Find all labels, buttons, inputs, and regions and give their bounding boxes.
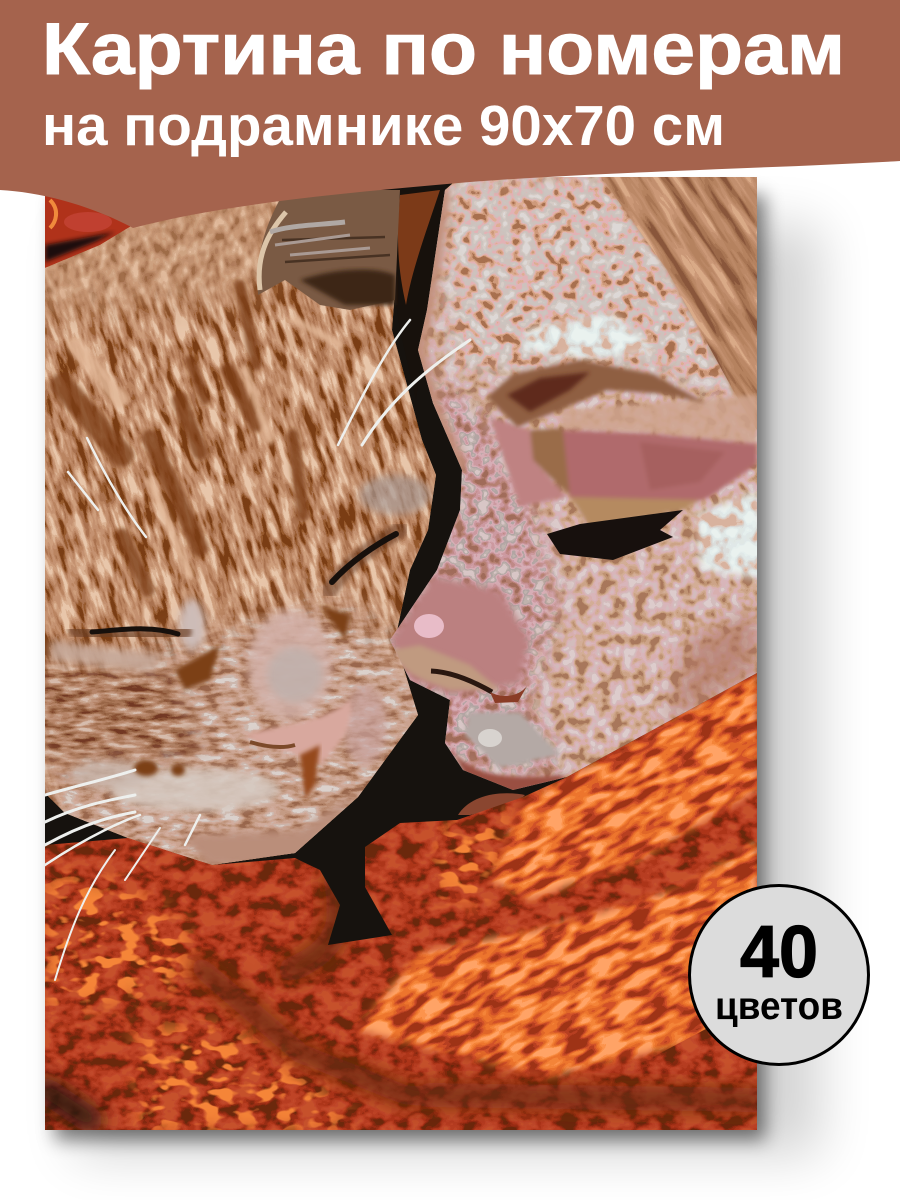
tabby stripes	[62, 285, 303, 590]
badge: 40 colours	[690, 886, 868, 1064]
right jaw tone	[665, 610, 757, 725]
badge number: 40	[740, 912, 818, 993]
cat muzzle spots	[134, 605, 350, 776]
chin and lip	[458, 793, 525, 815]
cat head	[45, 201, 436, 865]
face edge shading	[418, 190, 462, 470]
title: Картина по номерам	[42, 9, 845, 90]
eyebrow	[487, 360, 707, 427]
badge label: цветов	[715, 985, 843, 1028]
muzzle and bridge tones	[50, 475, 431, 866]
girl's face	[390, 177, 757, 790]
light fur highlights	[75, 320, 340, 575]
knitted scarf	[45, 673, 757, 1130]
red background corner	[45, 196, 130, 268]
cat nose	[245, 700, 351, 800]
hair over forehead	[599, 177, 757, 430]
eye socket	[490, 417, 757, 528]
bright orange yarn bands	[356, 673, 757, 1082]
painting: girl and ginger cat	[45, 177, 757, 1130]
eyelashes	[547, 510, 683, 560]
cat ear	[257, 190, 400, 310]
lip shadow	[449, 746, 566, 790]
scarf shadow folds	[45, 880, 757, 1120]
header band	[0, 0, 900, 228]
hair strand by temple	[398, 190, 440, 305]
scattered orange yarn highlights	[45, 800, 525, 1130]
upper lip highlight	[465, 712, 560, 768]
subtitle: на подрамнике 90х70 см	[42, 94, 725, 158]
cat closed eyes	[75, 530, 400, 636]
temple and under-brow tones	[560, 395, 757, 445]
canvas drop shadow	[55, 195, 820, 1155]
nose	[390, 575, 530, 703]
cat whiskers	[45, 320, 470, 980]
